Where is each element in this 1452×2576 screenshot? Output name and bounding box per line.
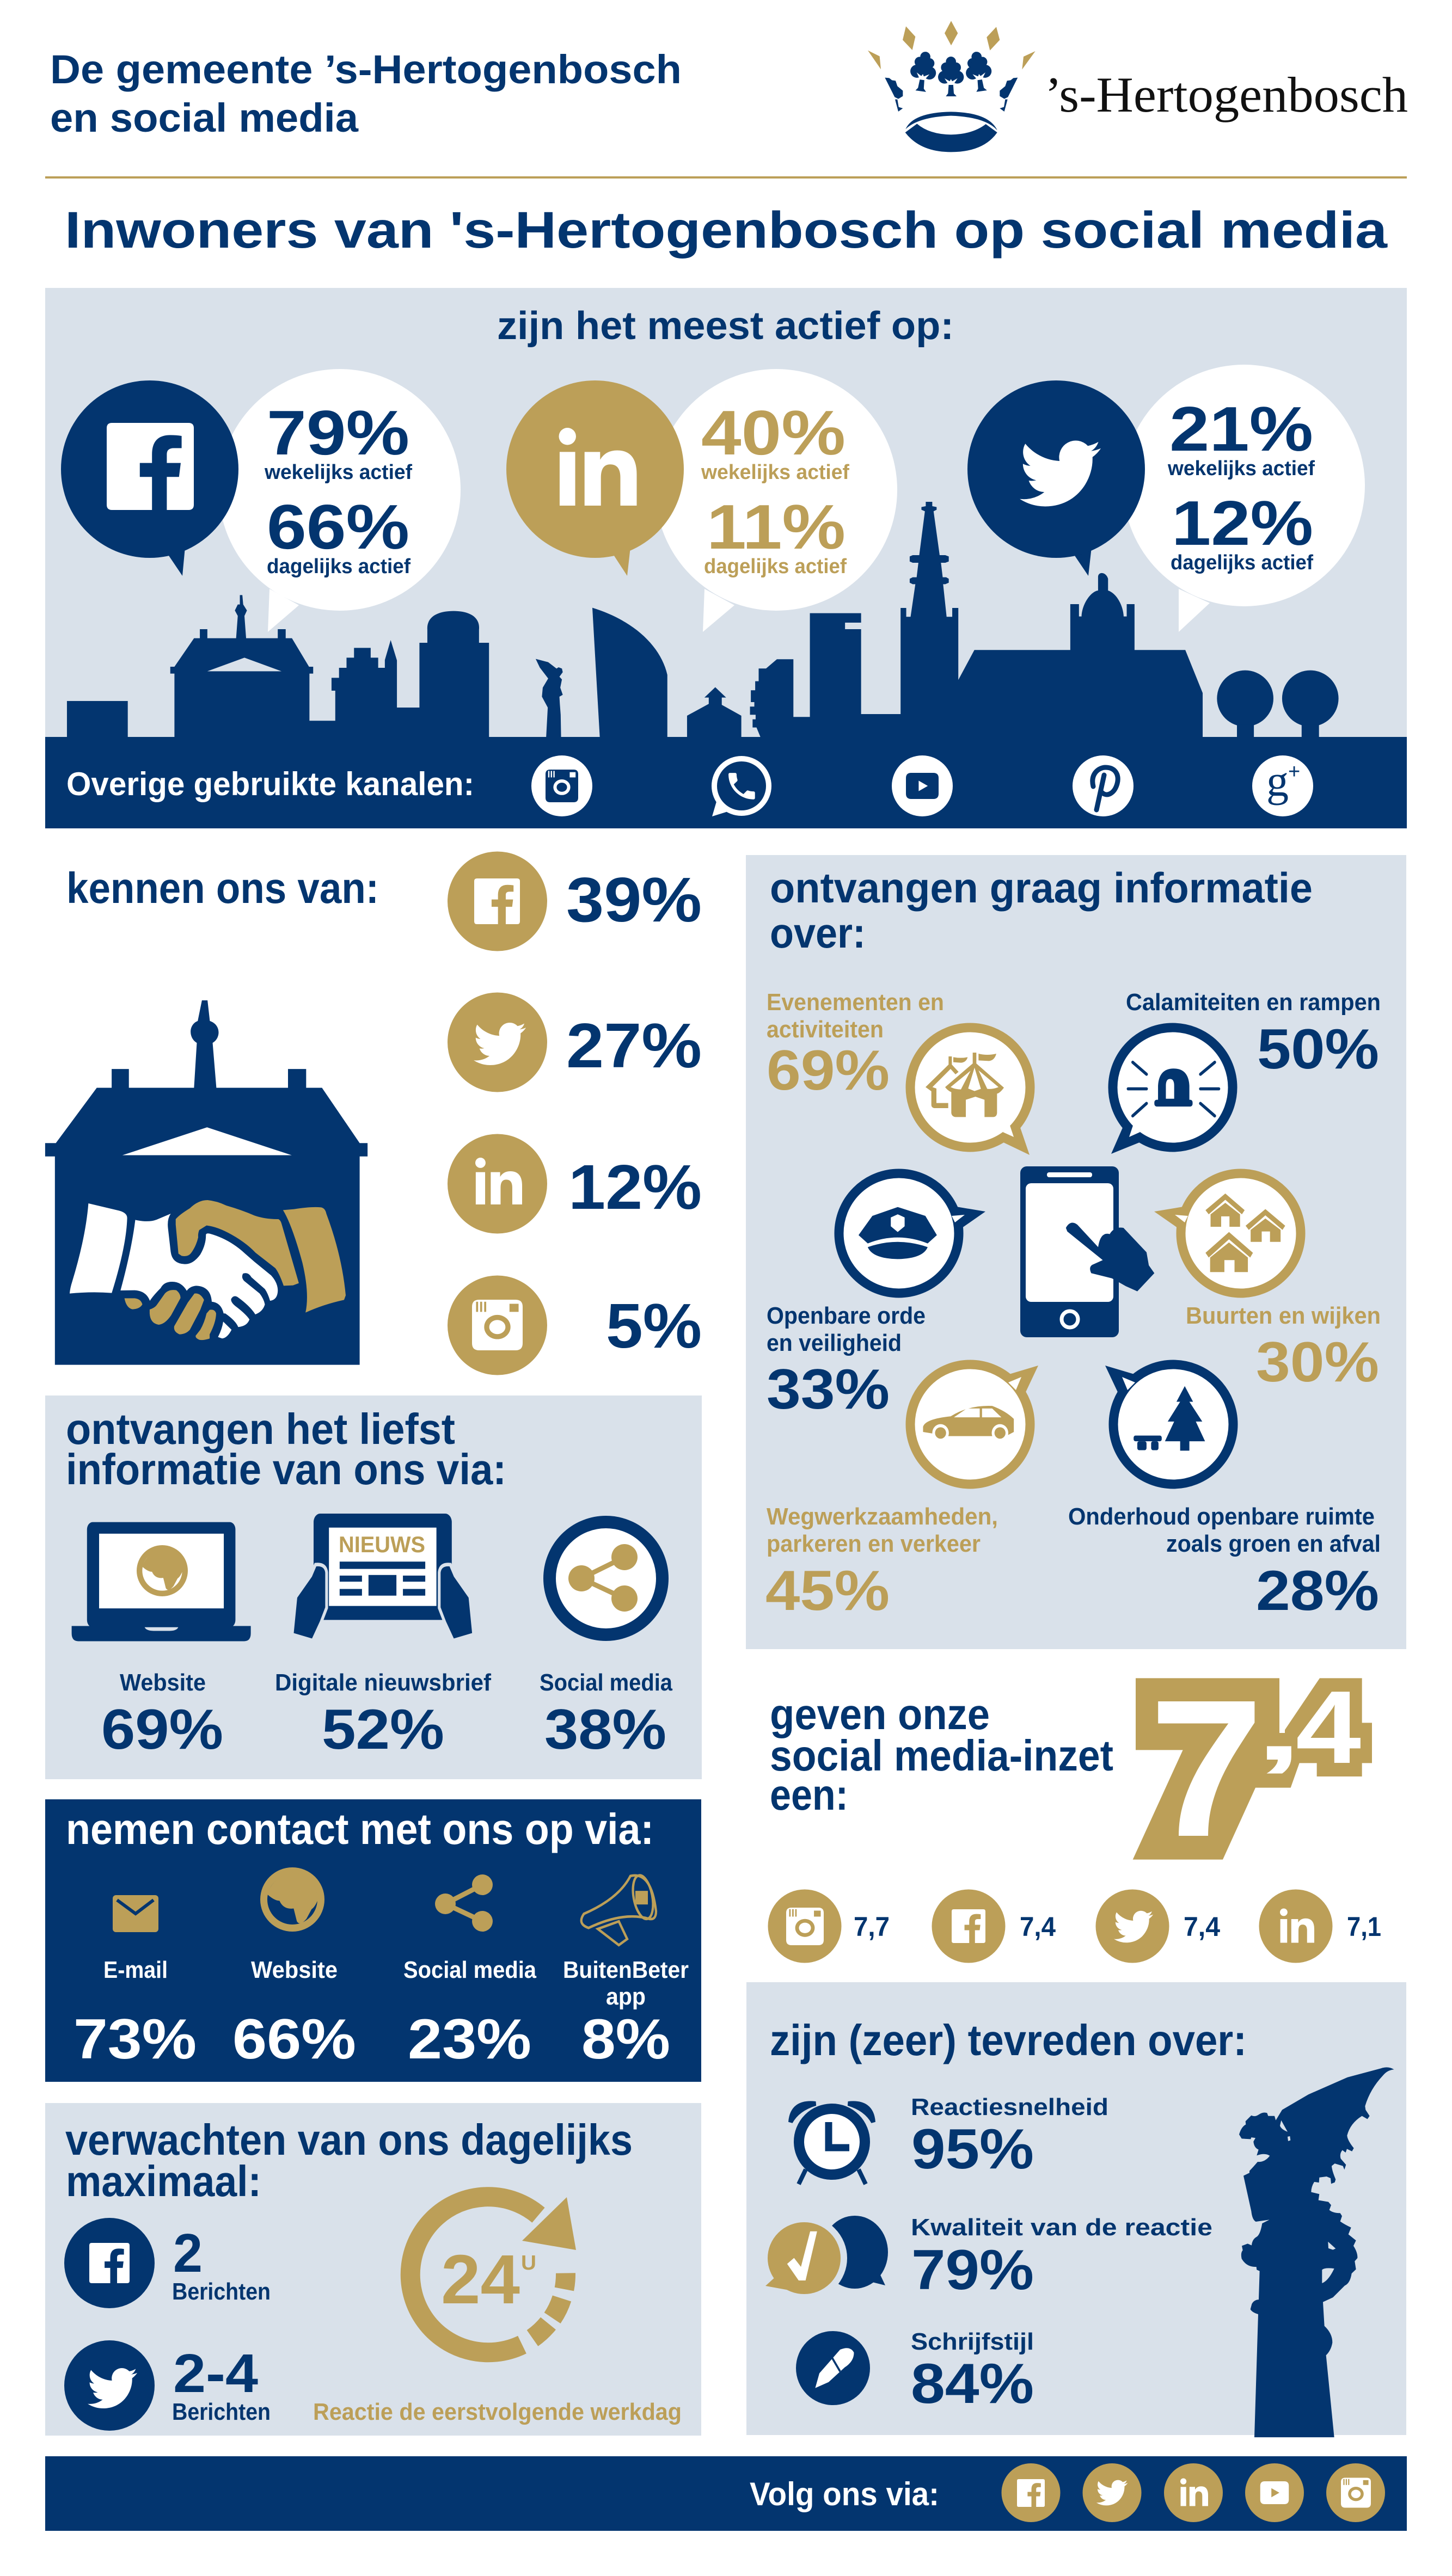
stat: kwaliteit van de reactie: Kwaliteit van de reactie — [911, 2214, 1212, 2241]
item: openbare orde en veiligheid: 33% — [767, 1358, 890, 1421]
bubble group: facebook: dagelijks actief — [267, 555, 411, 578]
icon: globe — [260, 1867, 324, 1932]
icon: 24 hour circular arrow: U — [521, 2252, 536, 2274]
item: wegwerkzaamheden, parkeren en verkeer — [765, 1364, 1038, 1622]
stat: digitale nieuwsbrief — [275, 1669, 491, 1761]
heading — [770, 1690, 1113, 1819]
stat: social media: Social media — [540, 1669, 672, 1696]
row: facebook 39% — [448, 851, 702, 951]
panel: ontvangen graag informatie over — [746, 855, 1406, 1649]
stat: website: Website — [251, 1957, 338, 1983]
icon: dragon statue — [1239, 2067, 1394, 2437]
item: calamiteiten en rampen: 50% — [1257, 1018, 1379, 1081]
icon: pinterest — [1073, 755, 1134, 816]
item: openbare orde en veiligheid — [767, 1173, 985, 1421]
item: calamiteiten en rampen — [1111, 989, 1381, 1154]
stat: social media — [540, 1669, 672, 1761]
bubble group: linkedin: 40% — [701, 397, 846, 468]
heading: kennen ons van: — [66, 864, 379, 912]
heading — [770, 864, 1313, 957]
heading — [66, 1405, 506, 1493]
header title — [50, 47, 682, 140]
bubble group: twitter: wekelijks actief — [1167, 457, 1315, 480]
footer label: Volg ons via: — [750, 2476, 939, 2512]
score: instagram — [768, 1890, 890, 1963]
stat: facebook 2 berichten: 2 — [173, 2223, 203, 2284]
heading: over: — [770, 909, 866, 957]
item: buurten en wijken: 30% — [1256, 1331, 1379, 1394]
bubble group: facebook: 79% — [267, 397, 409, 468]
heading: ontvangen graag informatie — [770, 864, 1313, 912]
row: twitter 27%: 27% — [566, 1010, 702, 1081]
footer bar: volg ons via — [45, 2456, 1407, 2531]
score: twitter — [1095, 1890, 1220, 1963]
item: openbare orde en veiligheid: Openbare orde — [767, 1302, 926, 1329]
stat: schrijfstijl: 84% — [911, 2352, 1034, 2415]
stat: e-mail: E-mail — [103, 1957, 168, 1983]
main heading: Inwoners van 's-Hertogenbosch op social media — [65, 201, 1388, 259]
panel heading: zijn het meest actief op: — [497, 304, 954, 348]
stat: social media — [403, 1957, 536, 2071]
icon: town hall with handshake — [45, 1000, 367, 1365]
icon: twitter — [1082, 2463, 1141, 2522]
other channels label: Overige gebruikte kanalen: — [66, 766, 474, 802]
big score 7,4: 7 — [1149, 1659, 1264, 1878]
section: geven onze social media-inzet een 7,4 — [768, 1659, 1381, 1963]
icon: megaphone — [581, 1873, 657, 1945]
panel: verwachten dagelijks maximaal — [45, 2103, 701, 2436]
icon: phone with pointing hand — [1020, 1166, 1154, 1337]
heading: maximaal: — [66, 2157, 261, 2205]
score: facebook — [932, 1890, 1056, 1963]
heading: nemen contact met ons op via: — [66, 1805, 654, 1853]
panel: zijn het meest actief op — [45, 288, 1407, 828]
bubble group: facebook — [61, 369, 461, 632]
item: buurten en wijken — [1154, 1173, 1381, 1394]
bubble group: linkedin: wekelijks actief — [701, 461, 849, 484]
row: twitter 27% — [448, 993, 702, 1092]
item: evenementen en activiteiten — [767, 989, 1030, 1155]
stat: e-mail: 73% — [73, 2008, 197, 2071]
stat: social media: 38% — [544, 1698, 666, 1761]
icon: instagram — [531, 755, 592, 816]
heading: zijn (zeer) tevreden over: — [770, 2016, 1247, 2064]
stat: twitter 2-4 berichten: Berichten — [172, 2399, 271, 2425]
heading: verwachten van ons dagelijks — [65, 2116, 633, 2164]
icon: 24 hour circular arrow: 24 — [441, 2241, 520, 2319]
icon: google plus: g — [1266, 756, 1289, 806]
item: onderhoud openbare ruimte: zoals groen en afval — [1166, 1530, 1381, 1557]
panel: ontvangen het liefst informatie via — [45, 1395, 702, 1779]
stat: buitenbeter app: app — [606, 1983, 646, 2010]
score: instagram: 7,7 — [854, 1911, 890, 1942]
item: wegwerkzaamheden, parkeren en verkeer: 45% — [765, 1559, 890, 1622]
icon: youtube — [892, 755, 953, 816]
icon: laptop — [72, 1522, 251, 1641]
stat: schrijfstijl — [796, 2328, 1034, 2415]
heading: informatie van ons via: — [66, 1445, 506, 1493]
item: wegwerkzaamheden, parkeren en verkeer: parkeren en verkeer — [767, 1530, 981, 1557]
big score 7,4: 4 — [1296, 1670, 1361, 1785]
icon: linkedin — [1164, 2463, 1223, 2522]
row: facebook 39%: 39% — [566, 864, 702, 935]
score: linkedin — [1259, 1890, 1381, 1963]
bubble group: twitter: 12% — [1172, 488, 1313, 558]
stat: kwaliteit van de reactie: 79% — [911, 2239, 1034, 2302]
icon: facebook — [1002, 2463, 1061, 2522]
skyline silhouette — [45, 502, 1407, 828]
stat: buitenbeter app: 8% — [581, 2008, 670, 2071]
stat: twitter 2-4 berichten: 2-4 — [173, 2343, 258, 2404]
stat: twitter 2-4 berichten — [64, 2340, 271, 2431]
icon: email — [113, 1895, 158, 1932]
stat: buitenbeter app: BuitenBeter — [563, 1957, 689, 1983]
heading: geven onze — [770, 1690, 990, 1738]
row: instagram 5% — [448, 1276, 702, 1375]
item: evenementen en activiteiten: Evenementen en — [767, 989, 944, 1016]
bubble group: twitter — [967, 365, 1365, 632]
item: onderhoud openbare ruimte: Onderhoud openbare ruimte — [1068, 1503, 1375, 1530]
icon: google plus: + — [1288, 760, 1300, 783]
bubble group: linkedin: 11% — [707, 491, 846, 562]
stat: digitale nieuwsbrief: Digitale nieuwsbrief — [275, 1669, 491, 1696]
panel: nemen contact met ons op via — [45, 1799, 701, 2082]
icon: youtube — [1245, 2463, 1304, 2522]
big score 7,4: , — [1255, 1679, 1303, 1779]
score: facebook: 7,4 — [1020, 1911, 1056, 1942]
item: evenementen en activiteiten: activiteiten — [767, 1016, 884, 1043]
icon: whatsapp — [712, 759, 769, 816]
stat: buitenbeter app — [563, 1957, 689, 2071]
stat: website: 69% — [101, 1698, 223, 1761]
header title: De gemeente ’s-Hertogenbosch — [50, 47, 682, 92]
logo: crown of 's-Hertogenbosch: ’s-Hertogenbosch — [1045, 67, 1408, 122]
stat: social media: 23% — [408, 2008, 531, 2071]
row: linkedin 12% — [448, 1134, 702, 1233]
bubble group: linkedin: dagelijks actief — [704, 555, 847, 578]
logo: crown of 's-Hertogenbosch — [868, 21, 1408, 152]
bubble group: twitter: dagelijks actief — [1171, 551, 1313, 574]
icon: tablet with newsletter — [292, 1514, 474, 1640]
panel: kennen ons van — [45, 851, 702, 1375]
heading — [65, 2116, 633, 2205]
bubble group: facebook: wekelijks actief — [264, 461, 412, 484]
icon: 24 hour circular arrow — [411, 2197, 576, 2352]
score: twitter: 7,4 — [1184, 1911, 1220, 1942]
item: openbare orde en veiligheid: en veiligheid — [767, 1330, 902, 1356]
icon: share circle — [550, 1522, 662, 1635]
row: linkedin 12%: 12% — [568, 1152, 702, 1222]
heading: een: — [770, 1770, 848, 1819]
item: evenementen en activiteiten: 69% — [767, 1039, 890, 1102]
stat: kwaliteit van de reactie — [764, 2214, 1212, 2302]
icon: tablet with newsletter: NIEUWS — [339, 1532, 425, 1557]
stat: reactiesnelheid: 95% — [911, 2118, 1034, 2181]
stat: facebook 2 berichten — [64, 2218, 271, 2308]
stat: schrijfstijl: Schrijfstijl — [911, 2328, 1034, 2355]
item: buurten en wijken: Buurten en wijken — [1186, 1302, 1381, 1329]
item: onderhoud openbare ruimte: 28% — [1256, 1559, 1379, 1622]
stat: website — [101, 1669, 223, 1761]
bubble group: linkedin — [506, 369, 897, 632]
icon: share — [435, 1874, 493, 1932]
stat: website: 66% — [232, 2008, 356, 2071]
item: onderhoud openbare ruimte — [1068, 1364, 1381, 1622]
item: calamiteiten en rampen: Calamiteiten en rampen — [1126, 989, 1381, 1016]
panel: zijn (zeer) tevreden over — [746, 1982, 1406, 2437]
icon: google plus — [1252, 755, 1313, 816]
stat: facebook 2 berichten: Berichten — [172, 2278, 271, 2305]
stat: e-mail — [73, 1957, 197, 2071]
stat: reactiesnelheid — [791, 2094, 1108, 2184]
heading: social media-inzet — [770, 1731, 1113, 1780]
score: linkedin: 7,1 — [1347, 1911, 1381, 1942]
stat: website: Website — [120, 1669, 206, 1696]
stat: website — [232, 1957, 356, 2071]
icon: instagram — [1326, 2463, 1385, 2522]
header title: en social media — [50, 95, 359, 140]
bubble group: facebook: 66% — [267, 491, 409, 562]
item: wegwerkzaamheden, parkeren en verkeer: Wegwerkzaamheden, — [767, 1503, 998, 1530]
big score 7,4 — [1133, 1659, 1372, 1878]
stat: reactiesnelheid: Reactiesnelheid — [911, 2094, 1108, 2120]
stat: digitale nieuwsbrief: 52% — [322, 1698, 444, 1761]
heading: ontvangen het liefst — [66, 1405, 455, 1453]
stat: social media: Social media — [403, 1957, 536, 1983]
caption: Reactie de eerstvolgende werkdag — [313, 2399, 682, 2425]
row: instagram 5%: 5% — [606, 1290, 702, 1361]
bubble group: twitter: 21% — [1169, 394, 1313, 464]
